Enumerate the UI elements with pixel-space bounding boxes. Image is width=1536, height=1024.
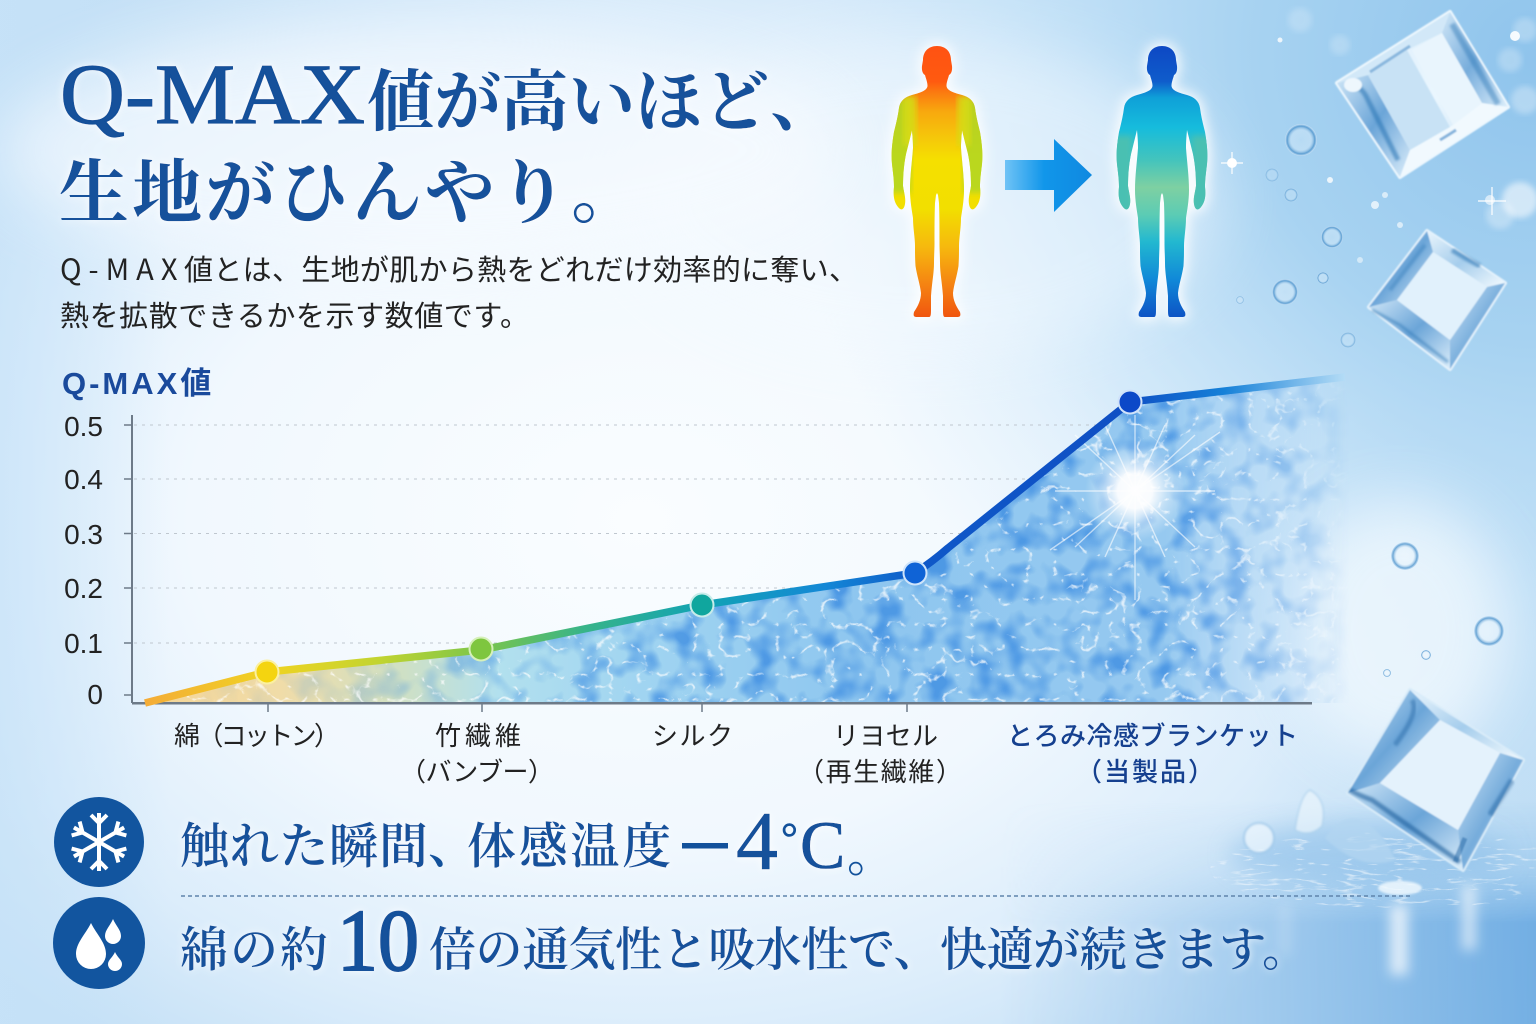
- benefit line 1: °: [781, 816, 798, 862]
- x axis labels: （バンブー）: [400, 752, 554, 789]
- ice texture area: [164, 384, 1343, 703]
- chart: [62, 366, 1380, 789]
- line series: [145, 377, 1345, 703]
- ice cube: top: [1337, 12, 1508, 177]
- benefit line 2: 10: [337, 893, 419, 990]
- ice cube: middle: [1369, 231, 1505, 369]
- benefit line 1: 、: [428, 808, 477, 878]
- data points: [256, 390, 1142, 684]
- x axis labels: シルク: [652, 716, 733, 753]
- x axis labels: とろみ冷感ブランケット: [1007, 716, 1298, 753]
- icon: snowflake: [54, 797, 144, 887]
- x axis labels: 綿（コットン）: [174, 716, 340, 753]
- y axis labels: 0.3: [64, 519, 103, 550]
- benefit line 2: [180, 893, 1309, 990]
- y axis labels: 0.1: [64, 628, 103, 659]
- description: Q-MAX: [60, 247, 184, 289]
- x axis labels: [174, 716, 1298, 789]
- title: 生地がひんやり。: [59, 137, 641, 238]
- ice cube: bottom: [1348, 690, 1523, 870]
- benefit line 2: 綿の約: [180, 911, 328, 980]
- benefit line 1: 体感温度: [467, 808, 671, 878]
- y axis labels: [64, 411, 103, 710]
- title: [59, 46, 837, 238]
- x axis labels: リヨセル: [833, 716, 938, 753]
- description: [60, 247, 858, 335]
- arrow: [1005, 139, 1092, 212]
- icon: body before cooling: [881, 46, 993, 318]
- x axis labels: （再生繊維）: [798, 752, 962, 789]
- sparkle: [1050, 415, 1220, 600]
- y axis title: Q-MAX値: [62, 366, 214, 401]
- water surface and splash: [1000, 790, 1536, 1024]
- benefit line 1: C: [800, 807, 845, 883]
- description: 熱を拡散できるかを示す数値です。: [60, 293, 529, 335]
- title: 値が高いほど、: [367, 49, 837, 145]
- benefit line 1: 。: [847, 816, 895, 885]
- title: Q-MAX: [60, 46, 365, 142]
- benefit line 1: 触れた瞬間: [180, 808, 428, 878]
- y axis labels: 0: [87, 679, 103, 710]
- x axis labels: （当製品）: [1076, 752, 1214, 789]
- benefit line 2: 倍の通気性と吸水性で、快適が続きます。: [429, 913, 1309, 980]
- y axis labels: 0.5: [64, 411, 103, 442]
- benefit line 1: 4: [736, 795, 778, 888]
- benefit line 1: [180, 795, 895, 888]
- y axis labels: 0.4: [64, 464, 103, 495]
- icon: body after cooling: [1106, 46, 1218, 318]
- description: 値とは、生地が肌から熱をどれだけ効率的に奪い、: [184, 247, 858, 289]
- water droplets: [1221, 31, 1520, 677]
- icon: water drops: [53, 897, 145, 989]
- x axis labels: 竹繊維: [435, 716, 521, 753]
- y axis labels: 0.2: [64, 573, 103, 604]
